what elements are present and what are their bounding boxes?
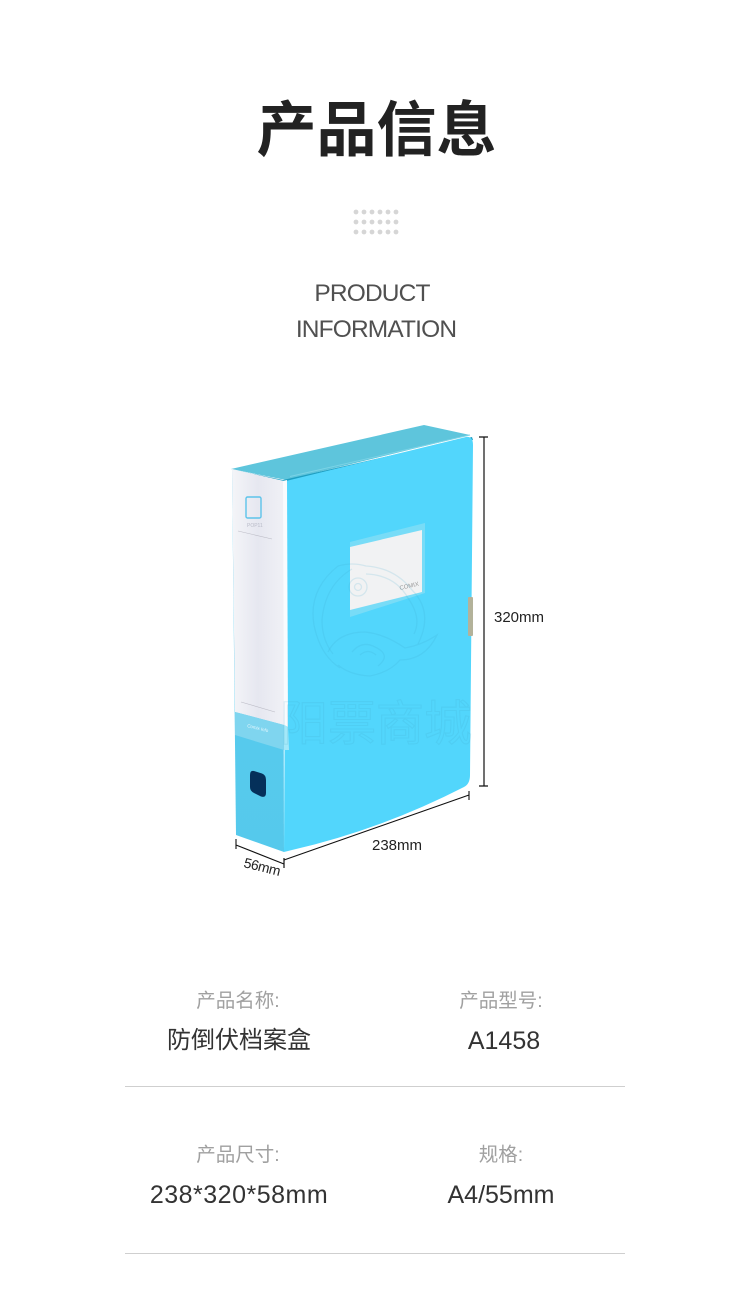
box spine: POP11 <box>247 523 263 529</box>
box spine <box>232 469 289 852</box>
text: A4/55mm <box>448 1181 554 1209</box>
label window <box>350 523 425 617</box>
text: A1458 <box>468 1027 540 1055</box>
watermark text: 阳票商城 <box>280 698 472 751</box>
depth dimension <box>236 839 284 879</box>
clasp <box>468 597 473 636</box>
box front cover <box>284 437 473 852</box>
label window: COMIX <box>399 582 420 592</box>
depth dimension: 56mm <box>242 854 282 879</box>
english subtitle: PRODUCT <box>314 280 430 307</box>
height dimension: 320mm <box>494 609 544 626</box>
spine finger hole <box>250 771 266 797</box>
decorative dot grid <box>354 210 398 234</box>
spec: model: 产品型号: <box>459 990 543 1012</box>
width dimension: 238mm <box>372 837 422 854</box>
height dimension <box>479 437 544 786</box>
spec: size: 产品尺寸: <box>196 1144 280 1166</box>
english subtitle <box>296 280 456 343</box>
title: 产品信息 <box>256 97 496 164</box>
box spine: Comix Info <box>247 723 269 733</box>
text: 238*320*58mm <box>150 1181 328 1209</box>
text: 防倒伏档案盒 <box>167 1027 311 1054</box>
product illustration: file box with dimensions <box>231 425 544 879</box>
spec: product name: 产品名称: <box>196 990 280 1012</box>
watermark logo <box>313 564 437 676</box>
box top face <box>231 425 473 483</box>
spec: format: 规格: <box>479 1144 523 1166</box>
width dimension <box>284 791 469 868</box>
english subtitle: INFORMATION <box>296 316 456 343</box>
